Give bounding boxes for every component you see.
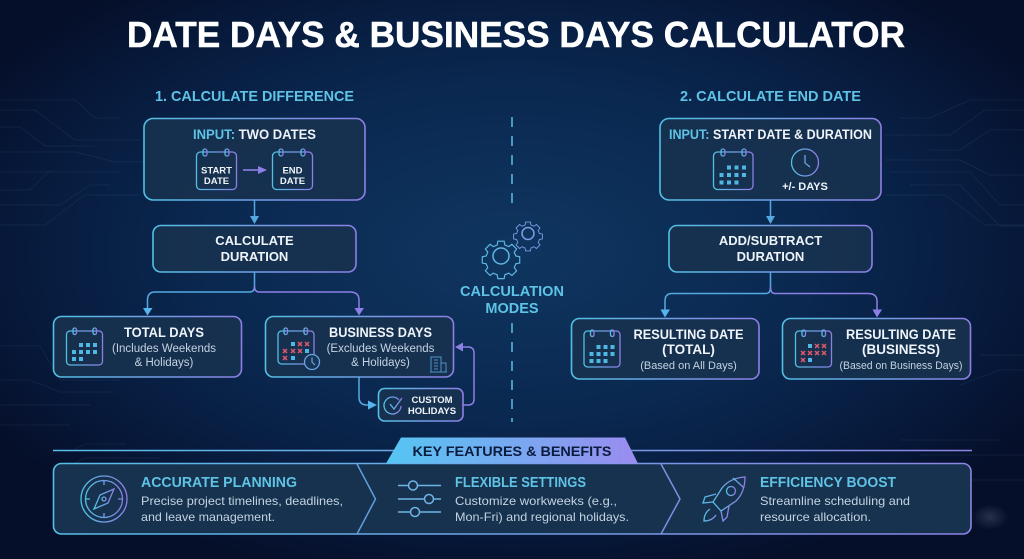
feature: flexible settings: Mon-Fri) and regional holidays. <box>455 510 629 524</box>
icon: check badge <box>384 397 402 414</box>
box: input start date and duration: +/- DAYS <box>782 181 828 193</box>
box: resulting date total: (TOTAL) <box>662 342 715 357</box>
box: resulting date business: (Based on Business Days) <box>840 360 962 372</box>
label: calculation modes: CALCULATION <box>460 284 564 300</box>
feature: flexible settings: FLEXIBLE SETTINGS <box>455 475 586 491</box>
icon: start date calendar <box>196 149 236 190</box>
chevron divider 1 <box>357 464 376 534</box>
icon: start date calendar: DATE <box>204 176 229 187</box>
icon: clock <box>792 149 818 176</box>
box: business days: BUSINESS DAYS <box>329 325 432 340</box>
feature: flexible settings <box>398 475 629 524</box>
label: calculation modes: MODES <box>485 301 539 317</box>
box: business days: & Holidays) <box>351 357 410 369</box>
arrow: custom holidays back to business <box>455 342 474 405</box>
icon: end date calendar: DATE <box>280 176 305 187</box>
feature: accurate planning <box>81 475 343 524</box>
heading: calculate end date: 2. CALCULATE END DATE <box>680 88 861 105</box>
box: custom holidays: HOLIDAYS <box>408 406 456 417</box>
box: calculate duration <box>153 226 356 272</box>
box: input start date and duration: INPUT: START DATE & DURATION <box>669 127 872 142</box>
arrow: input to add subtract <box>766 200 775 224</box>
feature: accurate planning: ACCURATE PLANNING <box>141 475 297 491</box>
box: business days <box>266 316 454 377</box>
box: input start date and duration <box>660 118 881 200</box>
icon: end date calendar: END <box>282 166 303 176</box>
box: resulting date business: RESULTING DATE <box>846 327 956 342</box>
arrows: split to resulting dates <box>660 272 882 318</box>
icon: rocket <box>703 477 745 521</box>
panel: calculate difference <box>54 88 474 421</box>
box: resulting date business: (BUSINESS) <box>862 342 940 357</box>
circuit pattern left <box>0 100 160 470</box>
heading: calculate difference: 1. CALCULATE DIFFERENCE <box>155 88 354 105</box>
box: calculate duration: CALCULATE <box>215 233 294 248</box>
icon: office building <box>430 357 447 372</box>
box: resulting date business <box>782 318 970 379</box>
box: business days: (Excludes Weekends <box>327 343 435 355</box>
banner: key features and benefits: KEY FEATURES & BENEFITS <box>412 443 612 459</box>
box: custom holidays: CUSTOM <box>412 395 453 406</box>
box: resulting date total: RESULTING DATE <box>634 327 744 342</box>
box: total days: & Holidays) <box>135 357 194 369</box>
arrow: start to end <box>243 169 259 171</box>
feature strip <box>54 464 971 534</box>
box: add subtract duration: ADD/SUBTRACT <box>719 233 822 248</box>
box: add subtract duration <box>669 226 872 272</box>
icon: compass <box>81 476 127 522</box>
box: input two dates: INPUT: TWO DATES <box>193 127 316 142</box>
feature: efficiency boost: resource allocation. <box>760 510 871 524</box>
center dashed divider <box>511 117 513 422</box>
box: total days: (Includes Weekends <box>112 343 216 355</box>
box: total days <box>54 316 242 377</box>
box: total days: TOTAL DAYS <box>124 325 204 340</box>
feature: accurate planning: Precise project timelines, deadlines, <box>141 494 343 508</box>
header rule <box>53 450 972 452</box>
arrow: business to custom holidays <box>359 377 377 410</box>
feature: efficiency boost: Streamline scheduling and <box>760 494 910 508</box>
section: key features and benefits <box>53 438 972 534</box>
icon: calendar with crosses <box>796 330 832 367</box>
panel: calculate end date <box>572 88 970 379</box>
box: input two dates <box>144 118 365 200</box>
feature: accurate planning: and leave management. <box>141 510 275 524</box>
icon: calendar with crosses and clock <box>278 328 320 370</box>
feature: efficiency boost: EFFICIENCY BOOST <box>760 475 896 491</box>
box: calculate duration: DURATION <box>221 249 288 264</box>
banner: key features and benefits <box>386 438 638 464</box>
icon: calendar <box>584 330 620 367</box>
box: custom holidays <box>378 388 463 421</box>
feature: flexible settings: Customize workweeks (e.g., <box>455 494 617 508</box>
feature: efficiency boost <box>703 475 910 524</box>
icon: sliders <box>398 481 441 516</box>
arrows: split to total and business <box>143 272 364 316</box>
circuit pattern right <box>885 100 1024 480</box>
title: DATE DAYS & BUSINESS DAYS CALCULATOR <box>127 14 905 55</box>
box: resulting date total <box>572 318 759 379</box>
icon: calendar <box>66 328 102 365</box>
box: add subtract duration: DURATION <box>737 249 804 264</box>
box: resulting date total: (Based on All Days) <box>640 360 737 372</box>
corner glow mark <box>972 504 1008 530</box>
icon: gears <box>482 222 542 279</box>
icon: end date calendar <box>272 149 312 190</box>
icon: calendar <box>714 149 753 190</box>
icon: start date calendar: START <box>201 166 232 176</box>
chevron divider 2 <box>661 464 680 534</box>
arrow: input to duration <box>250 200 259 224</box>
